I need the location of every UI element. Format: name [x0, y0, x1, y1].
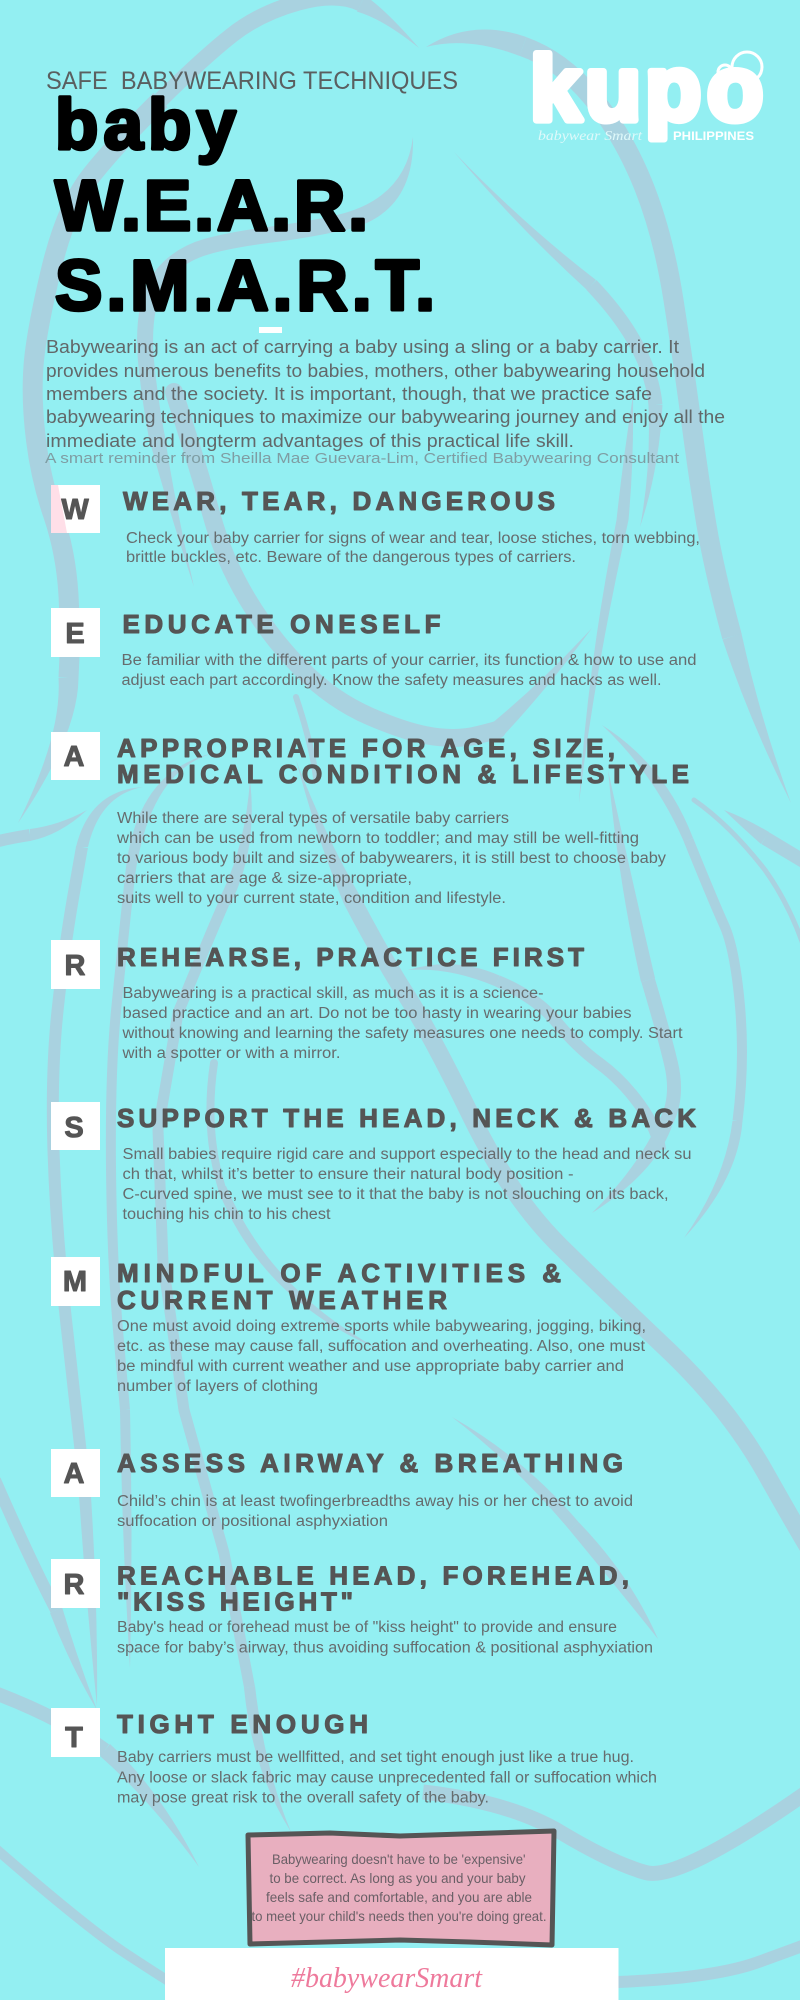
heading R2: REACHABLE HEAD, FOREHEAD, — [117, 1560, 629, 1590]
body A2: suffocation or positional asphyxiation — [117, 1513, 388, 1530]
footer bar with hashtag: #babywearSmart — [291, 1962, 483, 1994]
letter tile A — [51, 732, 100, 780]
body E: adjust each part accordingly. Know the safety measures and hacks as well. — [122, 672, 662, 689]
letter tile A2 — [51, 1449, 100, 1497]
section: M mindful — [51, 1257, 646, 1395]
heading A: MEDICAL CONDITION & LIFESTYLE — [117, 759, 689, 789]
body W — [126, 530, 700, 566]
body M: number of layers of clothing — [117, 1378, 318, 1395]
section: W wear tear dangerous — [51, 485, 700, 566]
letter tile M: M — [63, 1266, 87, 1298]
body R2: space for baby’s airway, thus avoiding suffocation & positional asphyxiation — [117, 1640, 653, 1656]
body A: which can be used from newborn to toddler; and may still be well-fitting — [116, 830, 639, 847]
body M: be mindful with current weather and use appropriate baby carrier and — [117, 1358, 624, 1375]
letter tile R2: R — [64, 1569, 85, 1601]
body M — [117, 1318, 646, 1395]
intro paragraph: provides numerous benefits to babies, mothers, other babywearing household — [46, 361, 705, 381]
letter tile R2 — [51, 1559, 100, 1608]
body R — [121, 985, 683, 1062]
main title: baby — [55, 86, 236, 165]
intro paragraph — [46, 337, 725, 451]
section: E educate oneself — [51, 608, 696, 689]
letter tile W: W — [61, 494, 89, 526]
heading W: WEAR, TEAR, DANGEROUS — [123, 486, 555, 516]
letter tile T: T — [65, 1722, 83, 1754]
body A: suits well to your current state, condition and lifestyle. — [117, 890, 506, 907]
letter tile R — [51, 940, 100, 989]
body S: C-curved spine, we must see to it that the baby is not slouching on its back, — [122, 1186, 668, 1203]
letter tile E — [51, 608, 100, 657]
body A — [116, 810, 666, 907]
body M: etc. as these may cause fall, suffocation and overheating. Also, one must — [117, 1338, 646, 1355]
body W: brittle buckles, etc. Beware of the dangerous types of carriers. — [126, 549, 576, 566]
main title: S.M.A.R.T. — [55, 247, 435, 326]
body W: Check your baby carrier for signs of wear and tear, loose stiches, torn webbing, — [126, 530, 700, 547]
callout: pink reminder box: Babywearing doesn't have to be 'expensive' — [272, 1851, 526, 1867]
body E — [122, 652, 696, 689]
heading A2: ASSESS AIRWAY & BREATHING — [117, 1448, 623, 1478]
section: S support — [51, 1102, 696, 1223]
section: A appropriate — [51, 732, 689, 907]
subtitle: SAFE BABYWEARING TECHNIQUES — [46, 67, 458, 95]
body M: One must avoid doing extreme sports while babywearing, jogging, biking, — [117, 1318, 646, 1335]
main title: W.E.A.R. — [55, 167, 368, 246]
white dash — [259, 327, 282, 333]
body R2: Baby's head or forehead must be of "kiss height" to provide and ensure — [117, 1619, 617, 1636]
body E: Be familiar with the different parts of your carrier, its function & how to use and — [122, 652, 696, 669]
heading S: SUPPORT THE HEAD, NECK & BACK — [117, 1103, 696, 1133]
heading M — [117, 1258, 561, 1315]
letter tile A2: A — [64, 1458, 85, 1490]
heading R2: "KISS HEIGHT" — [117, 1586, 353, 1616]
heading M: MINDFUL OF ACTIVITIES & — [117, 1258, 561, 1288]
section: R rehearse — [51, 940, 683, 1062]
body R2 — [117, 1619, 653, 1656]
callout: pink reminder box — [248, 1831, 554, 1945]
letter tile E: E — [65, 618, 85, 650]
body S: Small babies require rigid care and support especially to the head and neck su — [122, 1146, 692, 1163]
body A2: Child’s chin is at least twofingerbreadths away his or her chest to avoid — [117, 1493, 633, 1510]
intro paragraph: members and the society. It is important, though, that we practice safe — [46, 384, 652, 404]
section: A assess — [51, 1448, 633, 1530]
body R: Babywearing is a practical skill, as much as it is a science- — [122, 985, 544, 1002]
heading A: APPROPRIATE FOR AGE, SIZE, — [117, 733, 615, 763]
heading E: EDUCATE ONESELF — [122, 609, 440, 639]
letter tile S: S — [64, 1112, 84, 1144]
letter tile W — [51, 485, 100, 533]
body A2 — [117, 1493, 633, 1530]
intro paragraph: Babywearing is an act of carrying a baby using a sling or a baby carrier. It — [46, 337, 679, 357]
body R: based practice and an art. Do not be too hasty in wearing your babies — [122, 1005, 632, 1022]
heading T: TIGHT ENOUGH — [117, 1709, 368, 1739]
letter tile M — [51, 1257, 100, 1306]
heading A — [117, 733, 689, 789]
letter tile A: A — [64, 741, 85, 773]
letter tile S — [51, 1102, 100, 1150]
intro paragraph: immediate and longterm advantages of this practical life skill. — [46, 431, 574, 451]
logo: kupo philippines: PHILIPPINES — [673, 131, 754, 143]
body A: to various body built and sizes of babywearers, it is still best to choose baby — [117, 850, 666, 867]
credit line: A smart reminder from Sheilla Mae Guevara-Lim, Certified Babywearing Consultant — [45, 450, 680, 467]
heading R2 — [117, 1560, 629, 1616]
letter tile R: R — [65, 950, 86, 982]
body R: with a spotter or with a mirror. — [121, 1045, 340, 1062]
main title — [55, 86, 435, 326]
body R: without knowing and learning the safety measures one needs to comply. Start — [121, 1025, 683, 1042]
body T: may pose great risk to the overall safety of the baby. — [117, 1790, 489, 1806]
footer bar with hashtag — [165, 1948, 618, 2000]
callout: pink reminder box: to meet your child's needs then you're doing great. — [252, 1908, 546, 1924]
body T: Any loose or slack fabric may cause unprecedented fall or suffocation which — [117, 1770, 657, 1786]
callout: pink reminder box: feels safe and comfortable, and you are able — [266, 1889, 532, 1905]
logo: kupo philippines: babywear Smart — [538, 129, 643, 144]
body S: touching his chin to his chest — [122, 1206, 331, 1223]
section: T tight enough — [51, 1708, 657, 1806]
body A: carriers that are age & size-appropriate, — [117, 870, 412, 887]
heading R: REHEARSE, PRACTICE FIRST — [117, 942, 584, 972]
callout: pink reminder box: to be correct. As long as you and your baby — [270, 1870, 526, 1886]
body S — [122, 1146, 692, 1223]
section: R reachable — [51, 1559, 653, 1656]
body T — [117, 1749, 657, 1806]
body A: While there are several types of versatile baby carriers — [117, 810, 509, 827]
logo: kupo philippines: kupo — [530, 38, 763, 140]
body T: Baby carriers must be wellfitted, and set tight enough just like a true hug. — [117, 1749, 634, 1766]
body S: ch that, whilst it’s better to ensure their natural body position - — [122, 1166, 574, 1183]
heading M: CURRENT WEATHER — [117, 1285, 447, 1315]
intro paragraph: babywearing techniques to maximize our babywearing journey and enjoy all the — [46, 407, 725, 427]
letter tile T — [51, 1708, 100, 1757]
